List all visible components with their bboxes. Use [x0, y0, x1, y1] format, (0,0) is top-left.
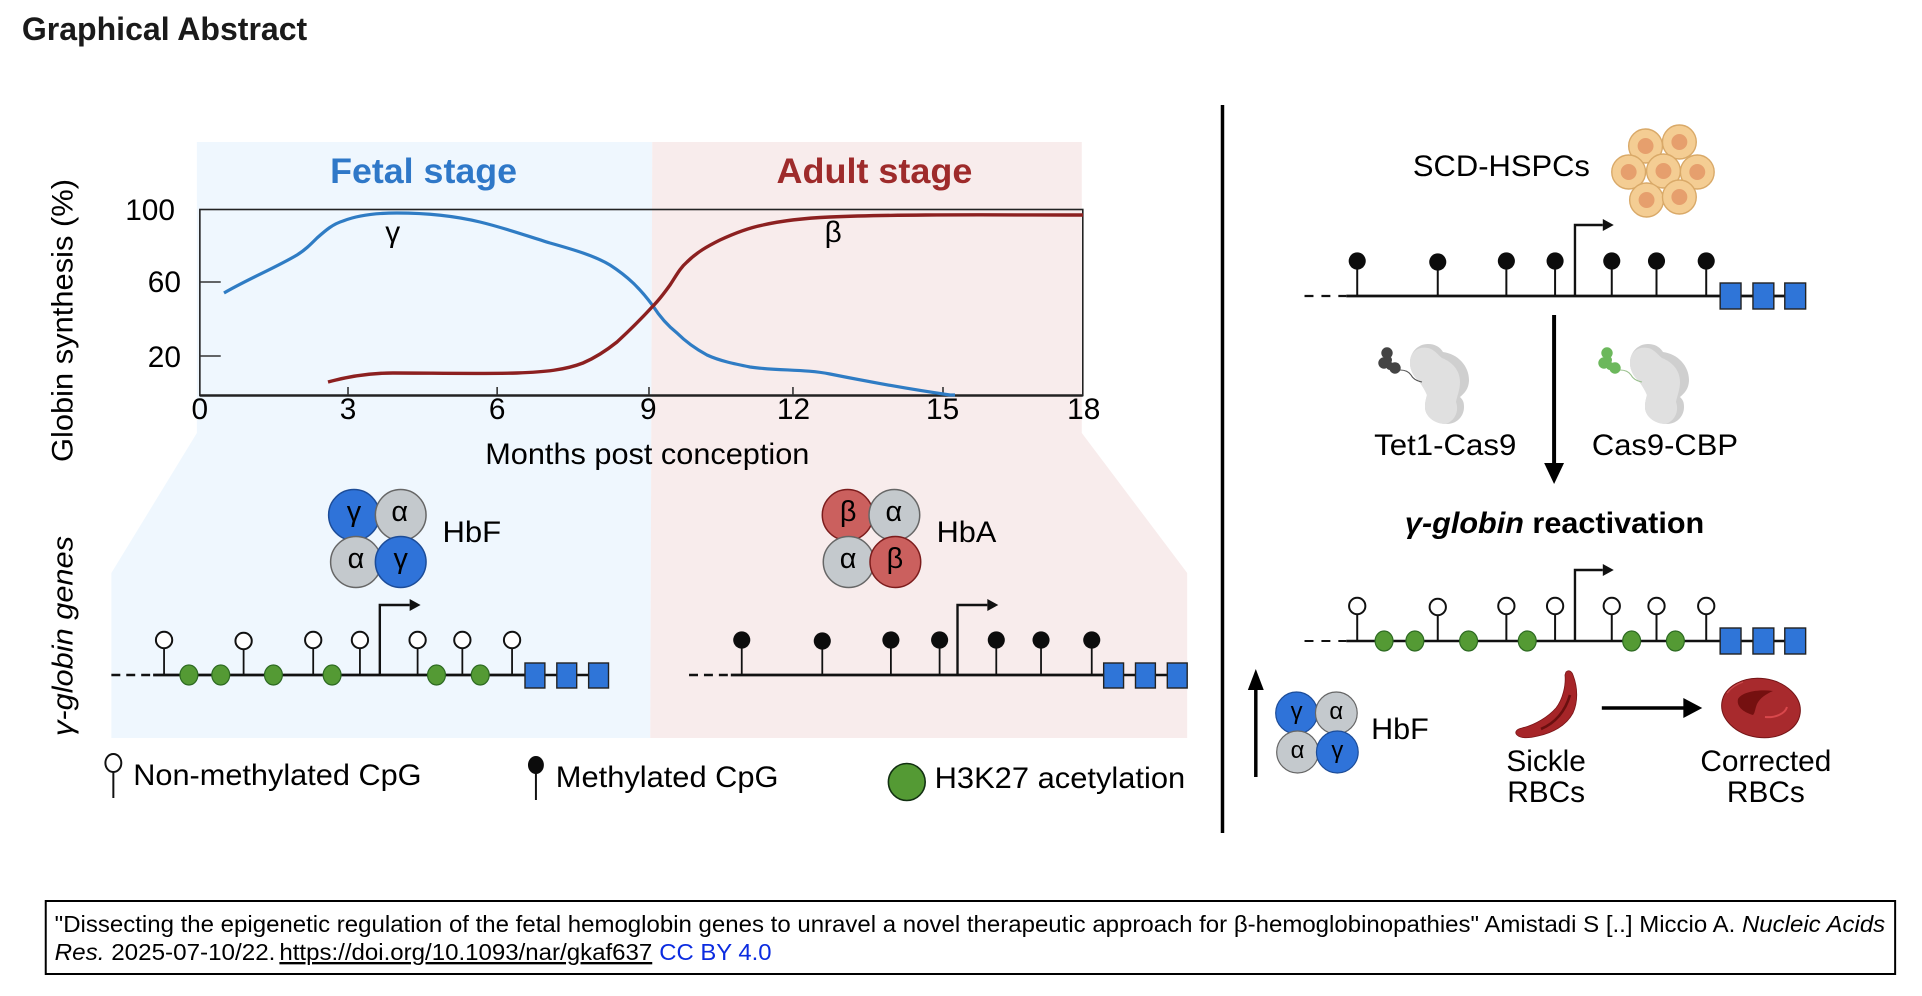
gene track: adult, methylated	[689, 599, 1187, 688]
icon: HbF tetramer, increased: α	[1291, 737, 1305, 764]
x axis tick labels	[192, 393, 1100, 426]
icon: HbA tetramer	[822, 490, 921, 588]
heading: adult stage: Adult stage	[777, 152, 972, 191]
icon: sickle red blood cell	[1516, 671, 1577, 738]
label: HbF: HbF	[442, 516, 501, 549]
gene track: SCD-HSPC methylated	[1305, 219, 1806, 309]
gene track: reactivated	[1305, 564, 1806, 654]
icon: Tet1-Cas9 protein	[1378, 344, 1469, 424]
x axis tick labels: 6	[489, 393, 505, 426]
label: SCD-HSPCs: SCD-HSPCs	[1413, 150, 1590, 183]
panel: adult stage background	[650, 142, 1187, 738]
icon: HbA tetramer: α	[886, 496, 902, 528]
icon: HbF tetramer, increased: γ	[1331, 737, 1343, 764]
x axis tick labels: 12	[777, 393, 810, 426]
x axis tick labels: 18	[1067, 393, 1100, 426]
x axis tick labels: 9	[640, 393, 657, 426]
icon: HbF tetramer: γ	[347, 496, 362, 528]
citation line 2: Res. 2025-07-10/22.	[55, 939, 275, 965]
title: Graphical Abstract	[22, 11, 308, 47]
divider	[1221, 105, 1224, 833]
citation box	[46, 901, 1895, 974]
icon: HbF tetramer: γ	[393, 543, 408, 575]
arrow: increase in HbF	[1248, 669, 1264, 777]
legend: H3K27 acetylation	[888, 762, 1185, 800]
legend: methylated CpG: Methylated CpG	[556, 761, 779, 794]
heading: fetal stage: Fetal stage	[330, 152, 517, 191]
label: HbF increased: HbF	[1371, 713, 1429, 746]
x axis tick labels: 3	[340, 393, 356, 426]
gene track: fetal, unmethylated	[111, 599, 609, 688]
arrow: down to reactivation	[1544, 315, 1564, 484]
legend: methylated CpG	[528, 756, 779, 800]
y axis tick labels: 100	[125, 194, 175, 227]
icon: HbA tetramer: β	[887, 543, 903, 575]
legend: H3K27 acetylation: H3K27 acetylation	[935, 762, 1185, 795]
icon: HbF tetramer: α	[348, 543, 364, 575]
legend: non-methylated CpG	[105, 754, 422, 798]
line chart: globin synthesis	[125, 194, 1100, 426]
x axis tick labels: 15	[926, 393, 959, 426]
y label: gamma-globin genes: γ-globin genes	[48, 536, 80, 736]
legend: non-methylated CpG: Non-methylated CpG	[133, 759, 422, 792]
citation link: https://doi.org/10.1093/nar/gkaf637	[279, 939, 652, 965]
x axis tick labels: 0	[192, 393, 208, 426]
beta globin curve	[328, 215, 1083, 382]
y axis title: Globin synthesis (%)	[47, 179, 80, 462]
label: HbA: HbA	[937, 516, 996, 549]
label: sickle RBCs	[1506, 745, 1586, 809]
label: sickle RBCs: RBCs	[1507, 776, 1585, 809]
citation line 1: "Dissecting the epigenetic regulation of the fetal hemoglobin genes to unravel a novel therapeutic approach for β-hemoglobinopathies" Amistadi S [..] Miccio A. Nucleic Acids	[55, 911, 1885, 937]
y axis tick labels: 20	[148, 341, 181, 374]
label: corrected RBCs: Corrected	[1700, 745, 1831, 778]
icon: HSPC cell cluster	[1612, 125, 1714, 217]
x axis title: Months post conception	[485, 438, 809, 471]
label: corrected RBCs	[1700, 745, 1831, 809]
panel: fetal stage background	[111, 142, 652, 738]
icon: HbF tetramer	[329, 490, 426, 588]
y axis tick labels	[125, 194, 181, 374]
icon: HbF tetramer, increased: α	[1329, 698, 1343, 725]
curve label: beta: β	[825, 216, 842, 249]
icon: HbA tetramer: α	[840, 543, 856, 575]
icon: HbF tetramer: α	[391, 496, 408, 528]
label: sickle RBCs: Sickle	[1506, 745, 1586, 778]
citation license: CC BY 4.0	[659, 939, 772, 965]
icon: HbF tetramer, increased: γ	[1291, 698, 1303, 725]
icon: Cas9-CBP protein	[1598, 344, 1689, 424]
icon: HbA tetramer: β	[840, 496, 856, 528]
label: corrected RBCs: RBCs	[1727, 776, 1805, 809]
icon: HbF tetramer, increased	[1276, 692, 1358, 773]
curve label: gamma: γ	[385, 216, 400, 249]
icon: corrected red blood cell	[1718, 673, 1804, 743]
label: Tet1-Cas9: Tet1-Cas9	[1374, 429, 1516, 462]
gamma globin curve	[224, 213, 955, 395]
arrow: sickle to corrected	[1602, 698, 1702, 718]
label: Cas9-CBP: Cas9-CBP	[1592, 429, 1738, 462]
heading: gamma-globin reactivation: γ-globin reactivation	[1405, 507, 1704, 540]
y axis tick labels: 60	[148, 266, 181, 299]
